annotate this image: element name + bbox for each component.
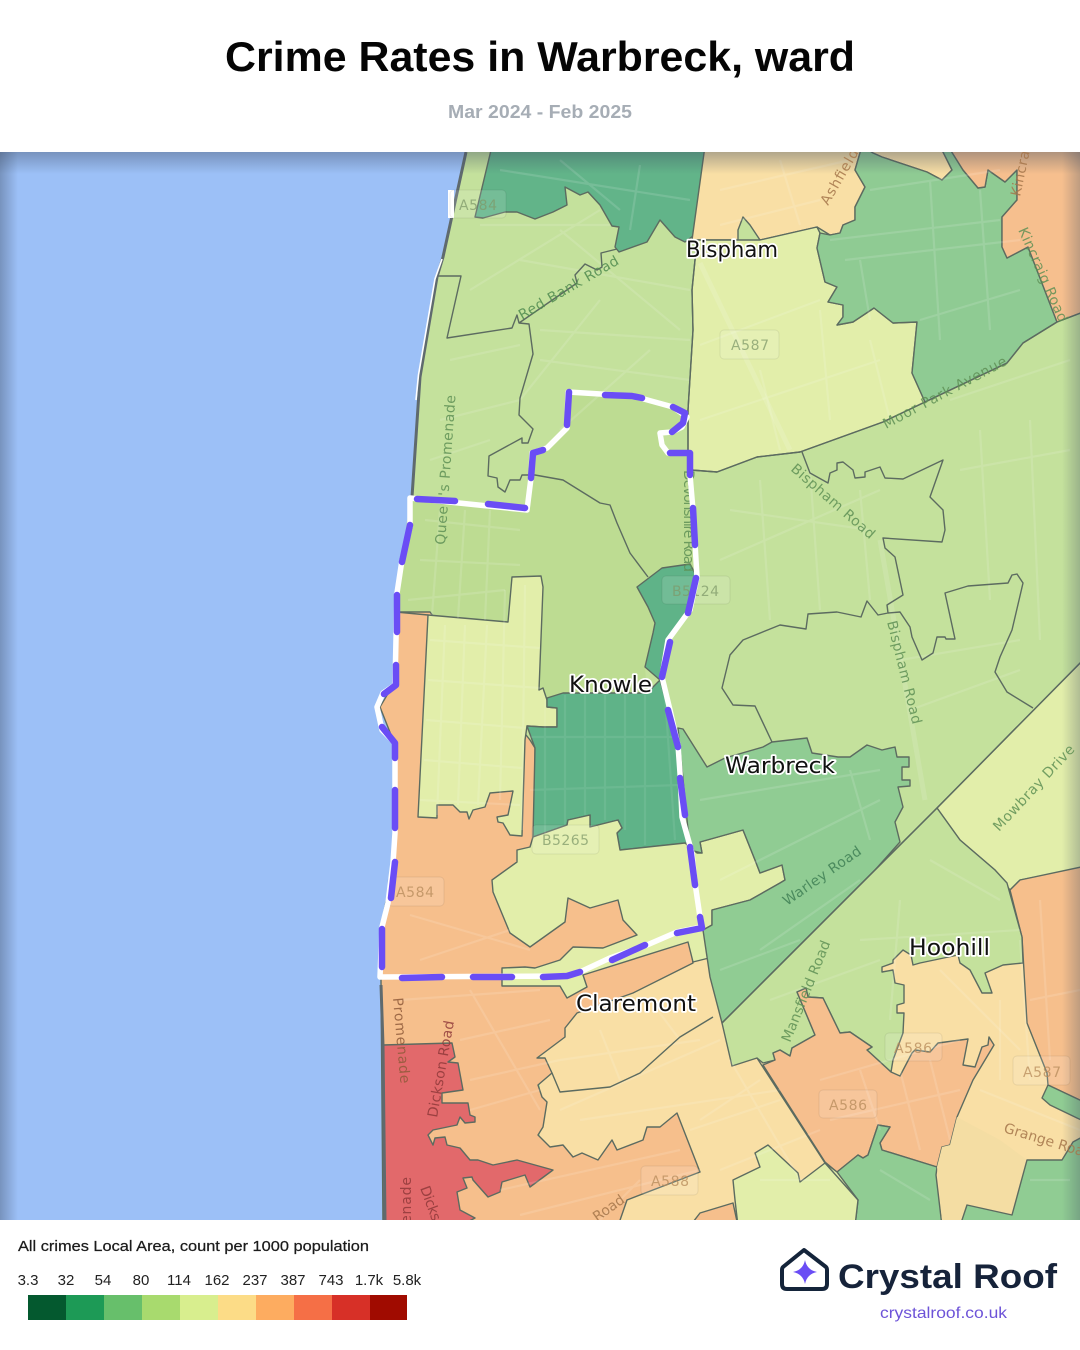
medium green zone: north-east [817, 146, 1057, 402]
yellow-green zone: Mowbray Drive [937, 657, 1080, 890]
internal boundary: south Hoohill [757, 1058, 858, 1200]
legend [18, 1238, 422, 1320]
shield: A584 south: A584 [396, 885, 434, 901]
shield: A587 south [1013, 1056, 1070, 1085]
label: Mansfield Road: Mansfield Road [779, 938, 834, 1044]
label: Dickson bottom: Dickson Road [416, 1184, 462, 1274]
red zone: Talbot [383, 1043, 553, 1226]
shield: A587 north [720, 330, 779, 359]
wordmark: Crystal Roof [838, 1258, 1058, 1296]
orange zone: Kincraig [948, 146, 1080, 322]
pale orange zone: Claremont and Hoohill south [540, 945, 1080, 1220]
yellow-green zone: south [733, 1145, 858, 1226]
dark green zone: Knowle south [527, 564, 697, 850]
icon: house with star [782, 1250, 827, 1289]
internal boundary: west Bispham edge [688, 240, 697, 450]
date range subtitle: Mar 2024 - Feb 2025 [448, 102, 632, 122]
road shields and labels [388, 136, 1080, 1274]
legend scale labels: 387 [280, 1272, 306, 1289]
shield: A584 north [448, 190, 506, 218]
medium green zone: Warbreck south-east [678, 728, 910, 1023]
shield: B5265 [532, 825, 599, 854]
label: Moor Park Avenue: Moor Park Avenue [880, 354, 1010, 433]
legend scale labels: 32 [58, 1272, 74, 1289]
legend scale labels: 162 [204, 1272, 230, 1289]
internal boundary: north-west Warbreck loop [722, 452, 945, 742]
legend scale labels: 237 [242, 1272, 268, 1289]
yellow-green zone: Bispham south [688, 227, 925, 472]
legend scale labels: 114 [167, 1272, 191, 1289]
legend scale labels: 80 [133, 1272, 149, 1289]
label: Bispham Road diagonal: Bispham Road [787, 461, 878, 543]
road network [400, 160, 1080, 1220]
pale orange zone: Bispham north [692, 146, 865, 240]
label: Road at bottom edge: Road [590, 1192, 628, 1225]
shield: A587 south: A587 [1023, 1065, 1061, 1081]
shield: B5124: B5124 [672, 584, 719, 600]
legend title: All crimes Local Area, count per 1000 population [18, 1238, 369, 1255]
orange zone: east of Hoohill [1010, 866, 1080, 1103]
light green zone inside ward: Knowle north [396, 392, 697, 698]
ward boundary: Warbreck [377, 392, 702, 978]
shield: A588 [641, 1166, 698, 1195]
yellow-green zone: south of Warbreck [492, 815, 785, 998]
label: Dickson Road: Dickson Road [425, 1019, 458, 1119]
website url: crystalroof.co.uk [880, 1305, 1008, 1322]
legend scale labels: 1.7k [355, 1272, 384, 1289]
label: Kincraig top: Kincraig [1008, 136, 1036, 198]
internal boundary: Claremont lines [552, 1017, 713, 1092]
title: Crime Rates in Warbreck, ward [225, 33, 855, 80]
label: Queen's Promenade: Queen's Promenade [433, 395, 459, 545]
vignette edges [0, 152, 1080, 1220]
shield: A586 west: A586 [829, 1098, 867, 1114]
shield: A584 north: A584 [459, 198, 497, 214]
label: Red Bank Road: Red Bank Road [516, 253, 622, 323]
label: Ashfield: Ashfield [818, 146, 862, 208]
orange zone: south of Hoohill [763, 988, 994, 1172]
legend scale labels: 743 [318, 1272, 344, 1289]
place label: Claremont: Claremont [576, 991, 696, 1017]
yellow-green zone: west of Knowle [418, 576, 557, 836]
legend scale labels: 3.3 [18, 1272, 38, 1289]
pale orange patch: top right [873, 152, 952, 179]
medium green zone: south centre [837, 1125, 942, 1226]
shield: A584 south [388, 877, 444, 906]
internal boundary: diagonal Warbreck to Layton [722, 657, 1080, 1023]
dark green zone: north of Bispham [475, 146, 705, 252]
orange zone: promenade and Claremont west [380, 612, 700, 1226]
label: Promenade south: Promenade [389, 997, 412, 1084]
place label: Warbreck: Warbreck [725, 753, 835, 779]
internal boundary: Moor Park Avenue extension [691, 311, 1080, 472]
coastline [381, 152, 466, 1220]
internal boundary: east Warbreck loop [888, 574, 1033, 708]
label: Warley Road: Warley Road [780, 843, 865, 909]
place label: Bispham: Bispham [686, 237, 778, 263]
logo: Crystal Roof [782, 1250, 1058, 1322]
internal boundary: Queen's Promenade block and Knowle divide [437, 276, 648, 577]
label: Promenade bottom: Promenade [399, 1177, 415, 1263]
place label: Hoohill: Hoohill [909, 935, 990, 961]
shield: A586 east [885, 1033, 942, 1061]
legend scale labels: 5.8k [393, 1272, 422, 1289]
shield: A587 north: A587 [731, 338, 769, 354]
legend scale labels [18, 1272, 422, 1289]
medium green patch: east edge [1042, 1085, 1080, 1122]
medium green zone: south-east [961, 1138, 1080, 1220]
internal boundary: Red Bank Road ridge [519, 249, 617, 323]
darker pale patch: Grange Road [937, 1117, 958, 1220]
orange patch: bottom edge [694, 1202, 737, 1220]
label: Kincraig Road: Kincraig Road [1014, 225, 1070, 325]
shield: A588: A588 [651, 1174, 689, 1190]
light green zone: Hoohill [722, 808, 1023, 1072]
legend colour bar [28, 1295, 407, 1320]
place label: Knowle: Knowle [569, 672, 652, 698]
sea [0, 152, 464, 1220]
white strip along the coast [416, 259, 442, 400]
white boundary outline [377, 392, 702, 977]
land base: light green crime band [405, 152, 1080, 1136]
label: Bispham Road vertical: Bispham Road [883, 619, 924, 726]
legend scale labels: 54 [95, 1272, 111, 1289]
shield: B5124 [662, 576, 730, 604]
internal boundary: west block south edge [396, 612, 428, 615]
shield: A586 west [819, 1090, 877, 1118]
label: Devonshire Road: Devonshire Road [680, 470, 696, 572]
shield: B5265: B5265 [542, 833, 589, 849]
label: Mowbray Drive: Mowbray Drive [990, 742, 1078, 835]
shield: A586 east: A586 [894, 1041, 932, 1057]
purple dashes [382, 392, 702, 978]
